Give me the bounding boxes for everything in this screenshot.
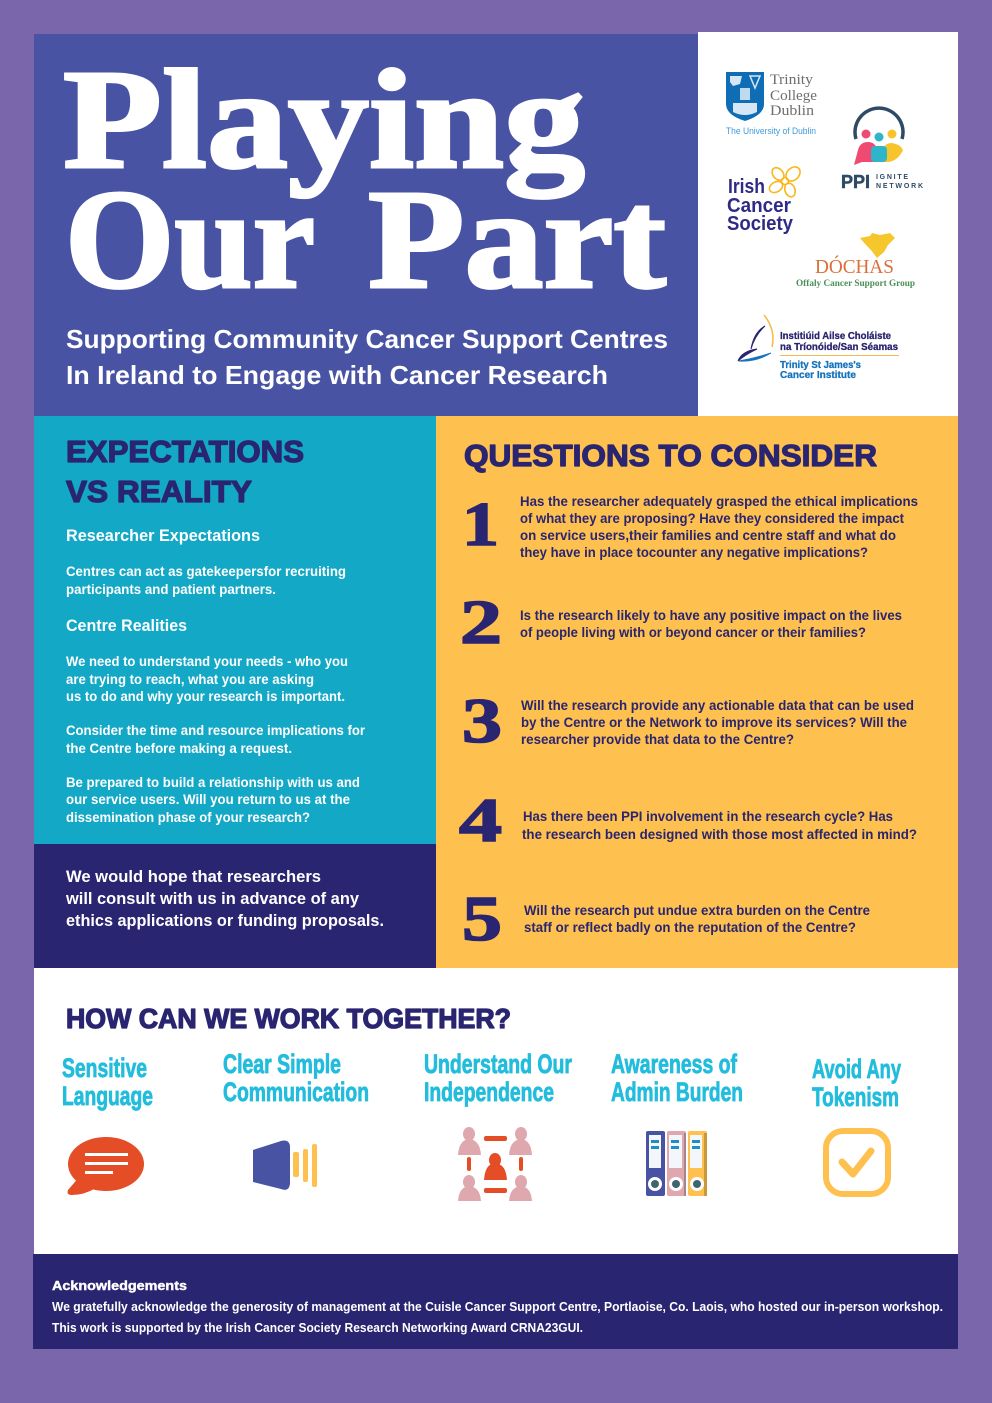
question 1: they have in place tocounter any negative implications? bbox=[520, 544, 868, 560]
logo: Dochas: Offaly Cancer Support Group bbox=[796, 279, 915, 289]
subtitle: In Ireland to Engage with Cancer Research bbox=[66, 360, 608, 390]
panel: acknowledgements: Acknowledgements bbox=[52, 1278, 187, 1293]
logo: PPI Ignite Network: IGNITE bbox=[876, 174, 908, 181]
item: clear simple communication: Clear Simple bbox=[223, 1049, 341, 1079]
question 5: Will the research put undue extra burden on the Centre bbox=[524, 902, 870, 918]
text: researcher expectations: Centres can act as gatekeepersfor recruiting bbox=[66, 563, 346, 579]
text: centre realities: us to do and why your research is important. bbox=[66, 688, 345, 704]
subtitle bbox=[66, 324, 668, 390]
text: centre realities: Consider the time and resource implications for bbox=[66, 722, 366, 738]
question 2: of people living with or beyond cancer or their families? bbox=[520, 624, 866, 640]
icon: speech bubble bbox=[68, 1137, 144, 1195]
question 3: by the Centre or the Network to improve its services? Will the bbox=[521, 714, 907, 730]
title: Playing bbox=[63, 40, 585, 198]
panel: consult callout: We would hope that researchers bbox=[66, 867, 321, 886]
logo: Dochas bbox=[796, 233, 915, 289]
logo: Trinity College Dublin: The University of Dublin bbox=[726, 126, 816, 137]
logo: Trinity St James's Cancer Institute: na Tríonóide/San Séamas bbox=[780, 342, 898, 353]
panel: acknowledgements: This work is supported by the Irish Cancer Society Research Networking Award CRNA23GUI. bbox=[52, 1321, 583, 1335]
question 4: 4 bbox=[459, 787, 502, 855]
question 2 bbox=[460, 589, 902, 657]
question 4 bbox=[459, 787, 917, 855]
icon: connected people bbox=[458, 1127, 532, 1201]
question 2: Is the research likely to have any positive impact on the lives bbox=[520, 607, 902, 623]
question 1: Has the researcher adequately grasped the ethical implications bbox=[520, 493, 918, 509]
panel: title banner bbox=[34, 34, 698, 416]
title: Part bbox=[368, 160, 666, 318]
text: centre realities: dissemination phase of your research? bbox=[66, 809, 310, 825]
question 1 bbox=[462, 491, 918, 560]
question 4: Has there been PPI involvement in the research cycle? Has bbox=[523, 808, 893, 824]
logo: Trinity College Dublin: Trinity bbox=[770, 72, 814, 88]
item: awareness of admin burden bbox=[611, 1049, 743, 1196]
logo: Trinity College Dublin: Dublin bbox=[770, 103, 815, 119]
logo: Trinity College Dublin bbox=[726, 72, 817, 137]
heading: expectations vs reality: EXPECTATIONS bbox=[66, 434, 304, 469]
logo: Irish Cancer Society: Cancer bbox=[727, 195, 791, 217]
logo: PPI Ignite Network: PPI bbox=[841, 172, 870, 192]
heading: how can we work together: HOW CAN WE WORK TOGETHER? bbox=[66, 1003, 511, 1034]
item: clear simple communication bbox=[223, 1049, 369, 1190]
logo: PPI Ignite Network: NETWORK bbox=[876, 183, 923, 190]
item: sensitive language: Language bbox=[62, 1081, 153, 1111]
question 1: of what they are proposing? Have they considered the impact bbox=[520, 510, 904, 526]
panel: acknowledgements bbox=[33, 1254, 958, 1349]
heading: expectations vs reality: VS REALITY bbox=[66, 474, 252, 509]
title: Our bbox=[65, 160, 315, 318]
panel: consult callout: will consult with us in advance of any bbox=[65, 889, 360, 908]
item: clear simple communication: Communication bbox=[223, 1077, 369, 1107]
text: centre realities: the Centre before making a request. bbox=[66, 740, 292, 756]
question 5: staff or reflect badly on the reputation of the Centre? bbox=[524, 919, 856, 935]
item: avoid any tokenism: Tokenism bbox=[812, 1082, 899, 1112]
question 2: 2 bbox=[460, 589, 502, 657]
title bbox=[63, 40, 666, 318]
logo: Trinity St James's Cancer Institute bbox=[738, 315, 899, 381]
panel: acknowledgements: We gratefully acknowledge the generosity of management at the Cuisle Cancer Support Centre, Portlaoise, Co. Laois, who hosted our in-person workshop. bbox=[52, 1300, 943, 1314]
question 5 bbox=[462, 883, 870, 954]
panel: expectations vs reality bbox=[34, 416, 436, 844]
item: awareness of admin burden: Admin Burden bbox=[611, 1077, 743, 1107]
icon: binders bbox=[646, 1131, 707, 1196]
text: researcher expectations bbox=[66, 526, 346, 597]
text: researcher expectations: Researcher Expectations bbox=[66, 526, 260, 545]
item: sensitive language: Sensitive bbox=[62, 1053, 147, 1083]
text: researcher expectations: participants and patient partners. bbox=[66, 581, 276, 597]
logo: Dochas: DÓCHAS bbox=[815, 254, 894, 278]
item: understand our independence: Understand Our bbox=[424, 1049, 572, 1079]
logo: Irish Cancer Society bbox=[727, 164, 803, 235]
text: centre realities: Be prepared to build a relationship with us and bbox=[66, 774, 360, 790]
logo: Trinity College Dublin: College bbox=[770, 88, 817, 104]
question 5: 5 bbox=[462, 883, 502, 954]
panel: consult callout: ethics applications or funding proposals. bbox=[66, 911, 384, 930]
question 3: Will the research provide any actionable data that can be used bbox=[521, 697, 914, 713]
subtitle: Supporting Community Cancer Support Centres bbox=[66, 324, 668, 354]
text: centre realities: are trying to reach, what you are asking bbox=[66, 671, 314, 687]
text: centre realities: our service users. Will you return to us at the bbox=[66, 791, 350, 807]
question 1: on service users,their families and centre staff and what do bbox=[520, 527, 896, 543]
logo: Irish Cancer Society: Irish bbox=[728, 176, 765, 198]
item: avoid any tokenism: Avoid Any bbox=[812, 1054, 901, 1084]
question 1: 1 bbox=[462, 491, 499, 559]
logo: PPI Ignite Network bbox=[841, 108, 923, 192]
item: understand our independence bbox=[424, 1049, 572, 1201]
panel: partner logos bbox=[698, 32, 958, 416]
icon: check box bbox=[826, 1131, 888, 1194]
item: understand our independence: Independence bbox=[424, 1077, 554, 1107]
text: centre realities: Centre Realities bbox=[66, 616, 187, 635]
panel: questions to consider bbox=[436, 416, 958, 968]
heading: questions to consider: QUESTIONS TO CONSIDER bbox=[464, 438, 877, 473]
item: sensitive language bbox=[62, 1053, 153, 1195]
question 3: 3 bbox=[462, 685, 502, 756]
text: centre realities: We need to understand your needs - who you bbox=[66, 653, 348, 669]
text: centre realities bbox=[66, 616, 366, 825]
heading: expectations vs reality bbox=[66, 434, 304, 509]
question 4: the research been designed with those most affected in mind? bbox=[522, 826, 917, 842]
logo: Trinity St James's Cancer Institute: Institiúid Ailse Choláiste bbox=[780, 331, 891, 342]
logo: Trinity St James's Cancer Institute: Trinity St James's bbox=[780, 360, 861, 371]
logo: Trinity St James's Cancer Institute: Cancer Institute bbox=[780, 370, 856, 381]
item: awareness of admin burden: Awareness of bbox=[611, 1049, 738, 1079]
icon: speaker bbox=[253, 1141, 317, 1190]
panel: consult callout bbox=[34, 844, 436, 968]
question 3 bbox=[462, 685, 914, 756]
logo: Irish Cancer Society: Society bbox=[727, 213, 794, 235]
panel: how can we work together bbox=[34, 968, 958, 1254]
item: avoid any tokenism bbox=[812, 1054, 901, 1194]
question 3: researcher provide that data to the Centre? bbox=[521, 731, 794, 747]
